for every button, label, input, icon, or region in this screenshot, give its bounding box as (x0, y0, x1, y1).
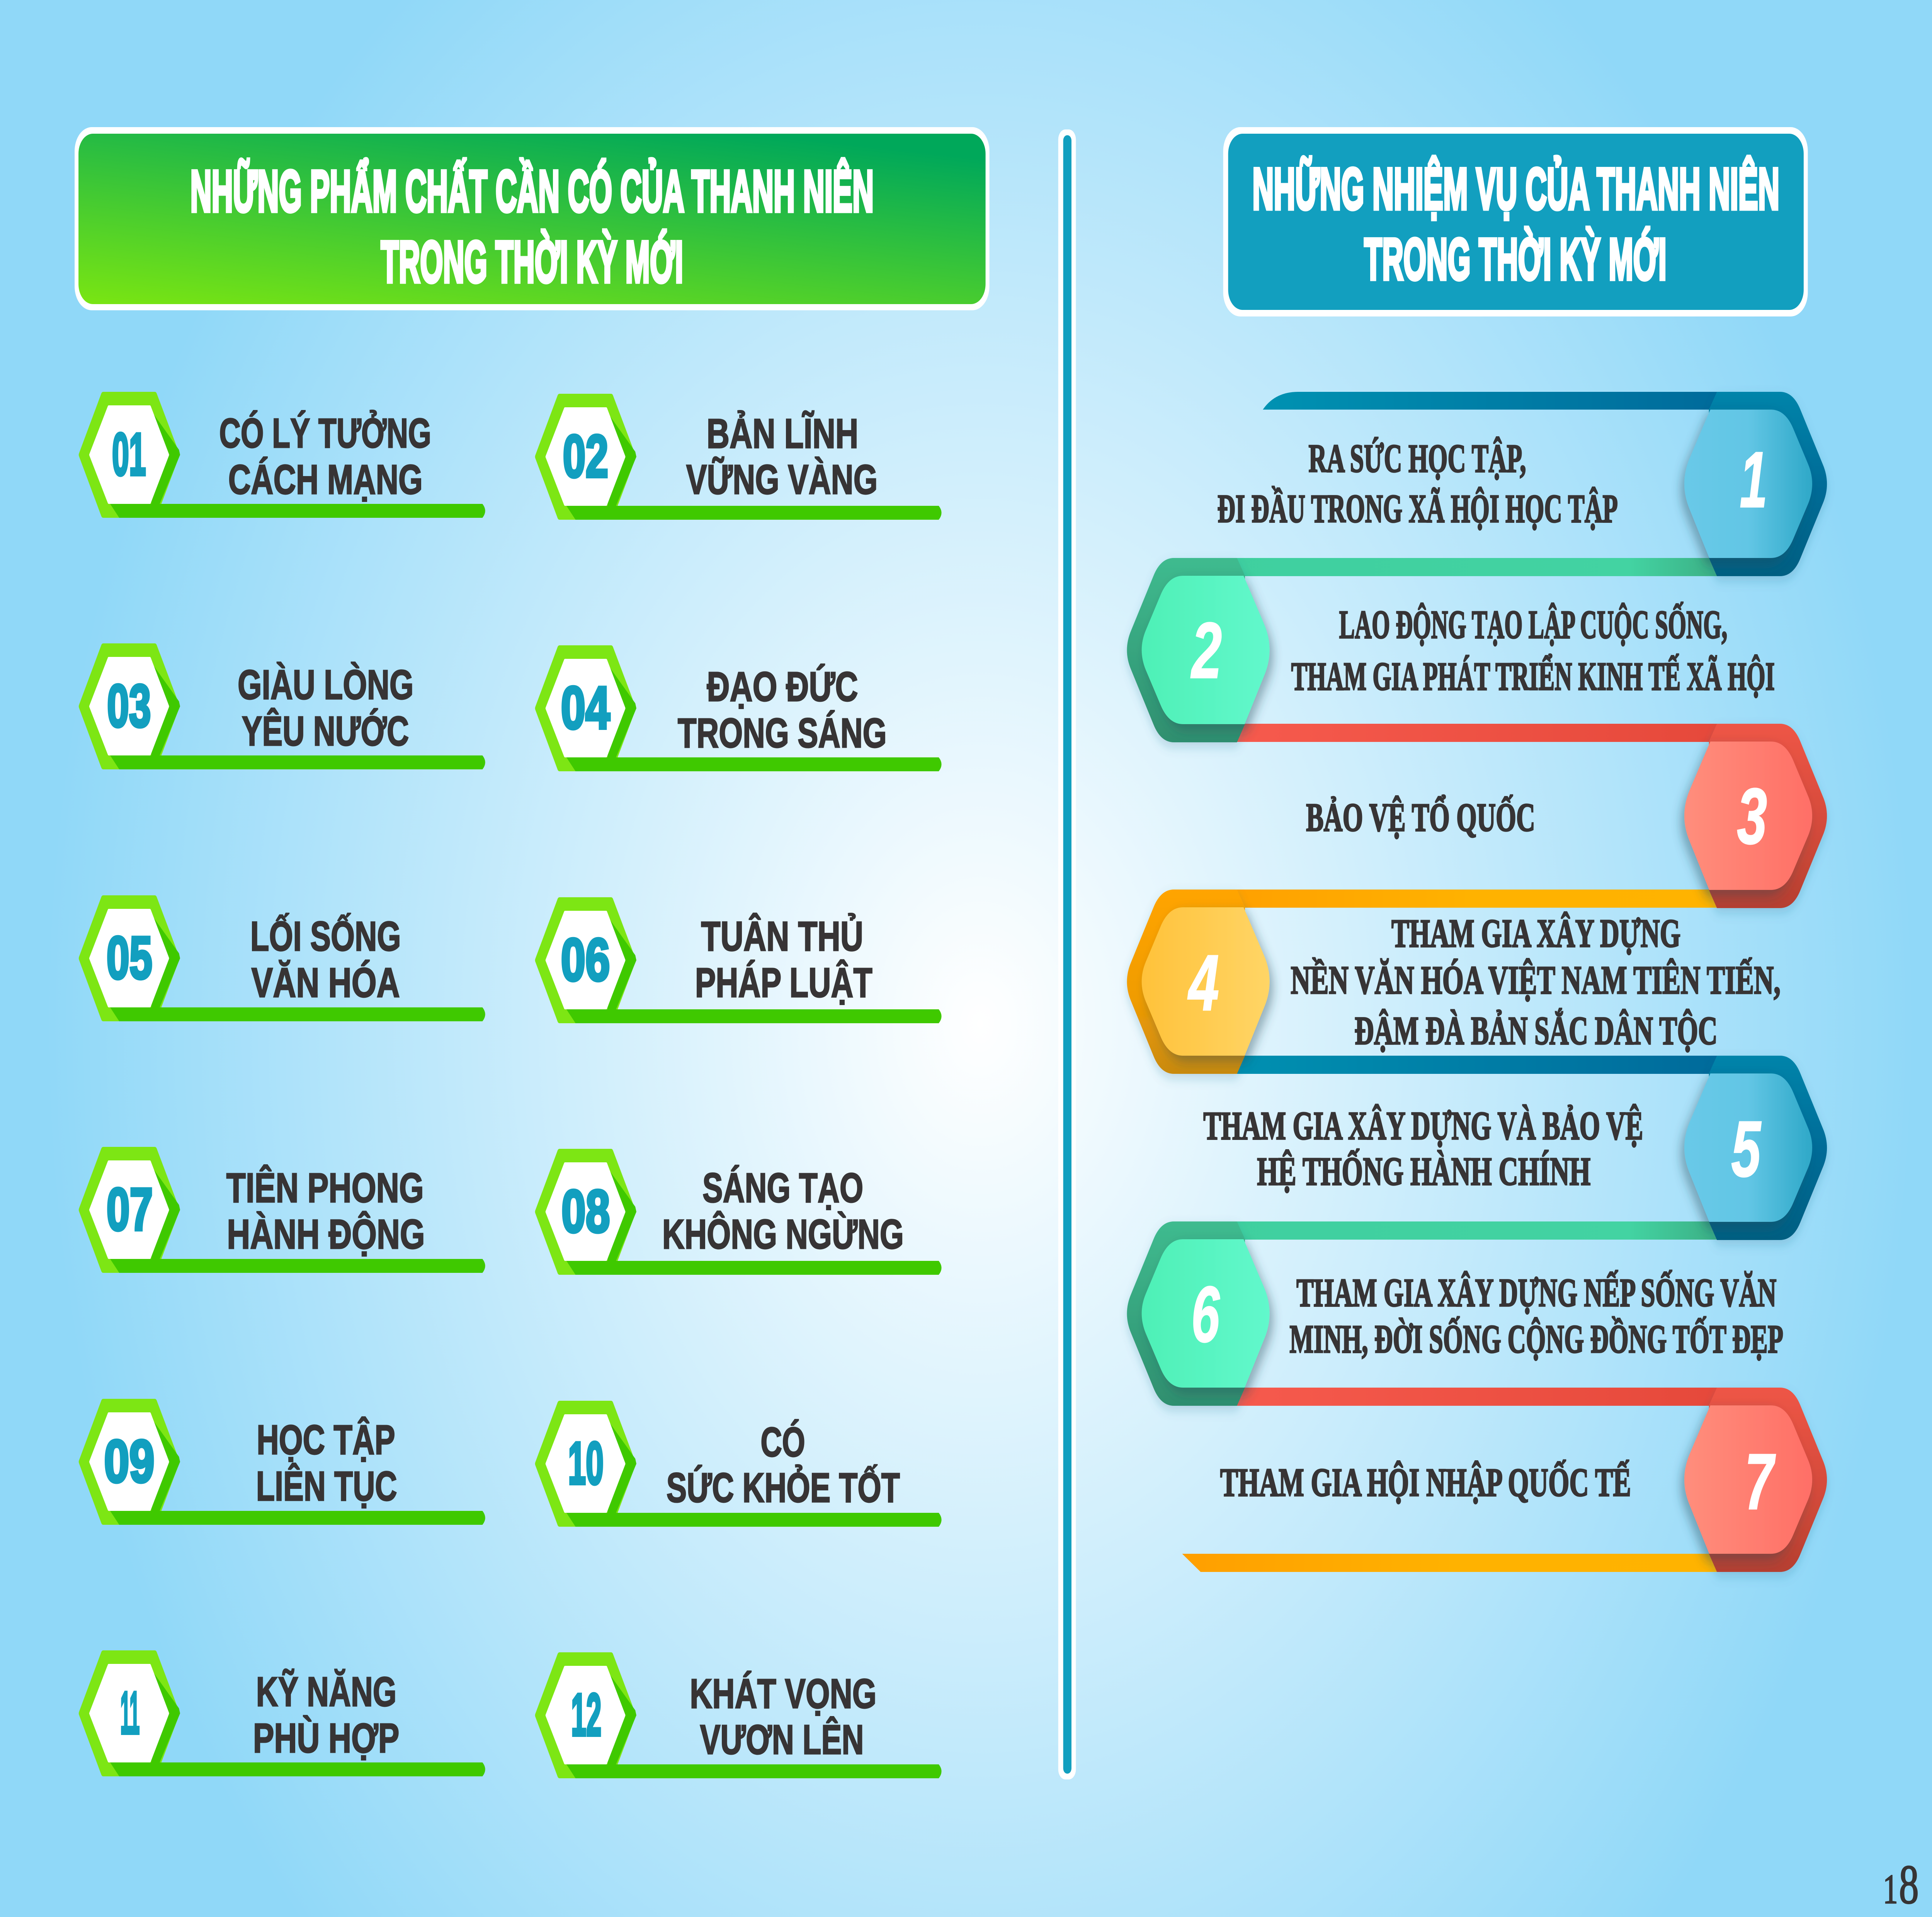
item 12: KHÁT VỌNG (690, 1670, 876, 1717)
page number: 1 (1883, 1866, 1898, 1912)
item 05: VĂN HÓA (252, 959, 400, 1006)
item 11: PHÙ HỢP (253, 1715, 399, 1761)
panel: tasks heading: TRONG THỜI KỲ MỚI (1364, 226, 1667, 292)
item 11: 11 (120, 1679, 139, 1746)
item 03 (81, 646, 485, 769)
item 04: ĐẠO ĐỨC (707, 663, 858, 710)
item 12: VƯƠN LÊN (700, 1716, 864, 1763)
item 08 (537, 1152, 942, 1275)
ribbon bars (1182, 392, 1735, 1572)
task 6: MINH, ĐỜI SỐNG CỘNG ĐỒNG TỐT ĐẸP (1289, 1316, 1783, 1361)
item 08: SÁNG TẠO (702, 1164, 863, 1211)
item 05: LỐI SỐNG (250, 913, 401, 959)
item 09: LIÊN TỤC (256, 1463, 397, 1509)
task 6: THAM GIA XÂY DỰNG NẾP SỐNG VĂN (1296, 1270, 1776, 1315)
item 05: 05 (107, 924, 152, 991)
task 1: ĐI ĐẦU TRONG XÃ HỘI HỌC TẬP (1218, 486, 1618, 531)
item 09: HỌC TẬP (257, 1416, 395, 1463)
task 4: THAM GIA XÂY DỰNG (1391, 911, 1680, 956)
item 01: 01 (112, 420, 146, 488)
item 03: 03 (107, 672, 151, 739)
task 7: THAM GIA HỘI NHẬP QUỐC TẾ (1220, 1459, 1631, 1505)
panel: qualities heading: TRONG THỜI KỲ MỚI (381, 229, 683, 294)
item 08: KHÔNG NGỪNG (662, 1211, 904, 1257)
task 5: 5 (1731, 1105, 1762, 1193)
item 02: BẢN LĨNH (707, 410, 858, 457)
item 06 (537, 900, 942, 1023)
item 04: 04 (561, 674, 610, 741)
page number (1883, 1854, 1919, 1915)
item 02: 02 (563, 422, 608, 490)
task 6: 6 (1191, 1270, 1220, 1359)
page number: 8 (1899, 1854, 1919, 1915)
task 3 (1306, 724, 1827, 908)
task 3: BẢO VỆ TỔ QUỐC (1306, 794, 1535, 840)
item 01: CÓ LÝ TƯỞNG (219, 410, 431, 456)
task 1: 1 (1740, 435, 1767, 524)
task 2: LAO ĐỘNG TẠO LẬP CUỘC SỐNG, (1339, 602, 1727, 647)
task 1 (1218, 392, 1827, 576)
task 1: RA SỨC HỌC TẬP, (1309, 436, 1526, 481)
item 12 (537, 1655, 942, 1778)
item 04: TRONG SÁNG (678, 709, 887, 756)
task 4 (1127, 890, 1781, 1074)
item 01: CÁCH MẠNG (228, 456, 423, 503)
item 09 (81, 1402, 485, 1525)
item 04 (537, 648, 942, 771)
panel: qualities heading (75, 127, 990, 310)
item 11: KỸ NĂNG (256, 1668, 396, 1715)
item 01 (81, 395, 485, 518)
task 6 (1127, 1221, 1783, 1406)
panel: tasks heading (1223, 127, 1808, 316)
item 07: 07 (107, 1175, 153, 1243)
item 02: VỮNG VÀNG (686, 456, 878, 503)
center divider (1058, 129, 1076, 1779)
panel: qualities heading: NHỮNG PHẨM CHẤT CẦN CÓ CỦA THANH NIÊN (190, 158, 874, 224)
task 7 (1220, 1388, 1827, 1572)
panel: tasks list (1127, 392, 1827, 1572)
item 10: SỨC KHỎE TỐT (667, 1464, 900, 1511)
panel: qualities list (81, 395, 942, 1778)
item 03: GIÀU LÒNG (238, 661, 413, 708)
item 07 (81, 1150, 485, 1273)
item 06: TUÂN THỦ (701, 912, 863, 959)
task 2 (1127, 558, 1775, 742)
item 09: 09 (104, 1427, 155, 1495)
item 07: TIÊN PHONG (226, 1164, 424, 1211)
item 10: CÓ (760, 1419, 805, 1465)
item 10 (537, 1404, 942, 1527)
item 03: YÊU NƯỚC (242, 708, 409, 754)
task 4: NỀN VĂN HÓA VIỆT NAM TIÊN TIẾN, (1291, 957, 1781, 1002)
item 06: PHÁP LUẬT (695, 959, 872, 1006)
item 08: 08 (561, 1177, 610, 1245)
item 05 (81, 898, 485, 1021)
task 4: ĐẬM ĐÀ BẢN SẮC DÂN TỘC (1355, 1008, 1718, 1053)
task 7: 7 (1745, 1437, 1776, 1526)
item 02 (537, 397, 942, 520)
item 06: 06 (561, 926, 610, 993)
task 2: THAM GIA PHÁT TRIỂN KINH TẾ XÃ HỘI (1291, 653, 1775, 699)
task 2: 2 (1190, 606, 1222, 695)
item 07: HÀNH ĐỘNG (227, 1211, 425, 1257)
item 12: 12 (571, 1681, 601, 1748)
task 4: 4 (1187, 939, 1219, 1027)
task 5: THAM GIA XÂY DỰNG VÀ BẢO VỆ (1203, 1104, 1643, 1148)
task 5: HỆ THỐNG HÀNH CHÍNH (1257, 1148, 1590, 1194)
item 10: 10 (568, 1429, 604, 1497)
item 11 (81, 1653, 485, 1776)
task 5 (1203, 1056, 1827, 1240)
task 3: 3 (1737, 772, 1767, 861)
